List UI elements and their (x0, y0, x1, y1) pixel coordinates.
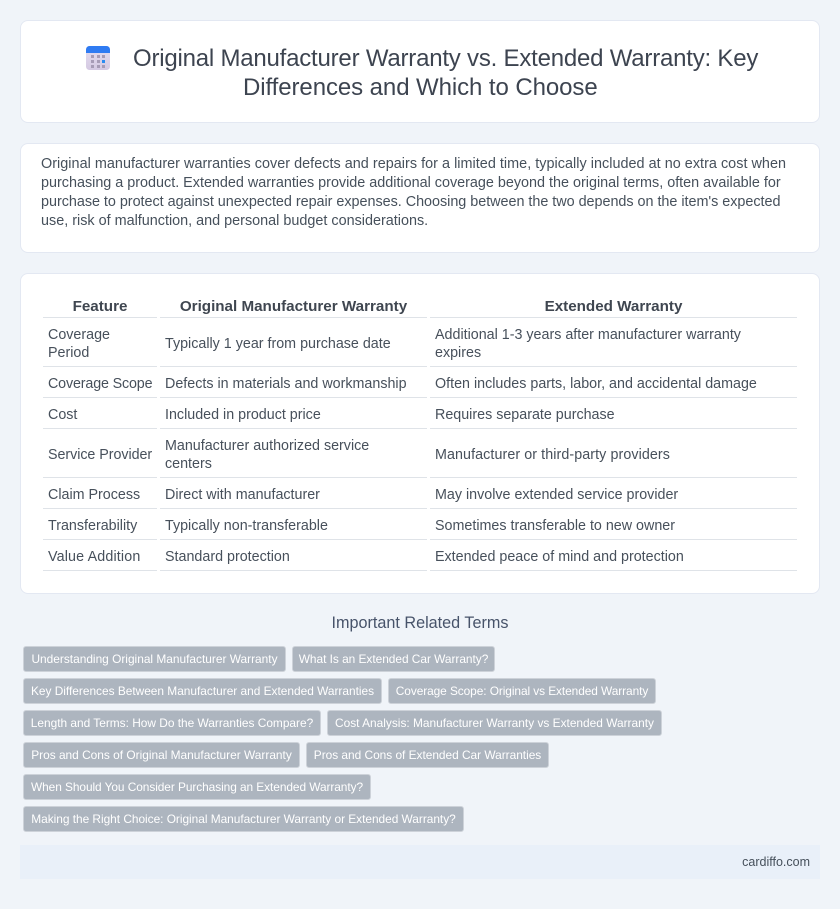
intro text (41, 156, 786, 229)
tag (23, 774, 371, 800)
panel: introduction (20, 143, 820, 253)
tag: Understanding Original Manufacturer Warranty (31, 652, 278, 666)
row: coverage period: Period (48, 345, 89, 361)
title: Original Manufacturer Warranty vs. Extended Warranty: Key (133, 45, 758, 72)
tag (388, 678, 656, 704)
icon: calendar (86, 46, 110, 70)
coverage period original: Typically 1 year from purchase date (165, 336, 391, 352)
service provider original (165, 438, 369, 472)
transferability original: Typically non-transferable (165, 518, 328, 534)
row: cost: Cost (48, 407, 77, 423)
tag: Coverage Scope: Original vs Extended Warranty (396, 684, 648, 698)
tag: What Is an Extended Car Warranty? (299, 652, 488, 666)
row: coverage period: Coverage (48, 327, 110, 343)
cost original: Included in product price (165, 407, 321, 423)
heading: related terms: Important Related Terms (332, 614, 508, 632)
table header: extended: Extended Warranty (545, 298, 682, 315)
coverage scope original: Defects in materials and workmanship (165, 376, 407, 392)
service provider extended: Manufacturer or third-party providers (435, 447, 670, 463)
title (133, 45, 758, 101)
cost extended: Requires separate purchase (435, 407, 615, 423)
row: transferability: Transferability (48, 518, 137, 534)
panel: comparison table (20, 273, 820, 594)
tag (23, 742, 300, 768)
tag: Cost Analysis: Manufacturer Warranty vs Extended Warranty (335, 716, 654, 730)
tag (327, 710, 662, 736)
tag: Pros and Cons of Extended Car Warranties (314, 748, 541, 762)
tag: Pros and Cons of Original Manufacturer Warranty (31, 748, 292, 762)
row: coverage scope: Coverage Scope (48, 376, 152, 392)
intro text: purchasing a product. Extended warranties provide additional coverage beyond the original terms, often available for (41, 175, 781, 191)
coverage scope extended: Often includes parts, labor, and accidental damage (435, 376, 757, 392)
row: service provider: Service Provider (48, 447, 152, 463)
tag: When Should You Consider Purchasing an Extended Warranty? (31, 780, 363, 794)
title: Differences and Which to Choose (243, 74, 598, 101)
intro text: use, risk of malfunction, and personal budget considerations. (41, 213, 428, 229)
row: claim process: Claim Process (48, 487, 140, 503)
table header: feature: Feature (73, 298, 127, 315)
tag (306, 742, 549, 768)
tag: Making the Right Choice: Original Manufacturer Warranty or Extended Warranty? (31, 812, 456, 826)
coverage period extended (435, 327, 741, 361)
value addition original: Standard protection (165, 549, 290, 565)
coverage period extended: expires (435, 345, 481, 361)
footer: cardiffo.com (742, 855, 810, 869)
row: value addition: Value Addition (48, 549, 140, 565)
service provider original: Manufacturer authorized service (165, 438, 369, 454)
intro text: purchase to protect against unexpected repair expenses. Choosing between the two depends on the item's expected (41, 194, 780, 210)
tag (23, 646, 286, 672)
service provider original: centers (165, 456, 212, 472)
tag: Key Differences Between Manufacturer and Extended Warranties (31, 684, 374, 698)
tag (23, 678, 382, 704)
tag: Length and Terms: How Do the Warranties Compare? (31, 716, 313, 730)
value addition extended: Extended peace of mind and protection (435, 549, 684, 565)
tag (292, 646, 495, 672)
intro text: Original manufacturer warranties cover defects and repairs for a limited time, typically included at no extra cost when (41, 156, 786, 172)
claim process original: Direct with manufacturer (165, 487, 320, 503)
transferability extended: Sometimes transferable to new owner (435, 518, 675, 534)
table header: original: Original Manufacturer Warranty (180, 298, 407, 315)
footer (20, 845, 820, 879)
tag (23, 710, 321, 736)
row: coverage period (48, 327, 110, 361)
tag (23, 806, 464, 832)
comparison table (43, 296, 797, 572)
claim process extended: May involve extended service provider (435, 487, 678, 503)
coverage period extended: Additional 1-3 years after manufacturer warranty (435, 327, 741, 343)
panel: title card (20, 20, 820, 123)
